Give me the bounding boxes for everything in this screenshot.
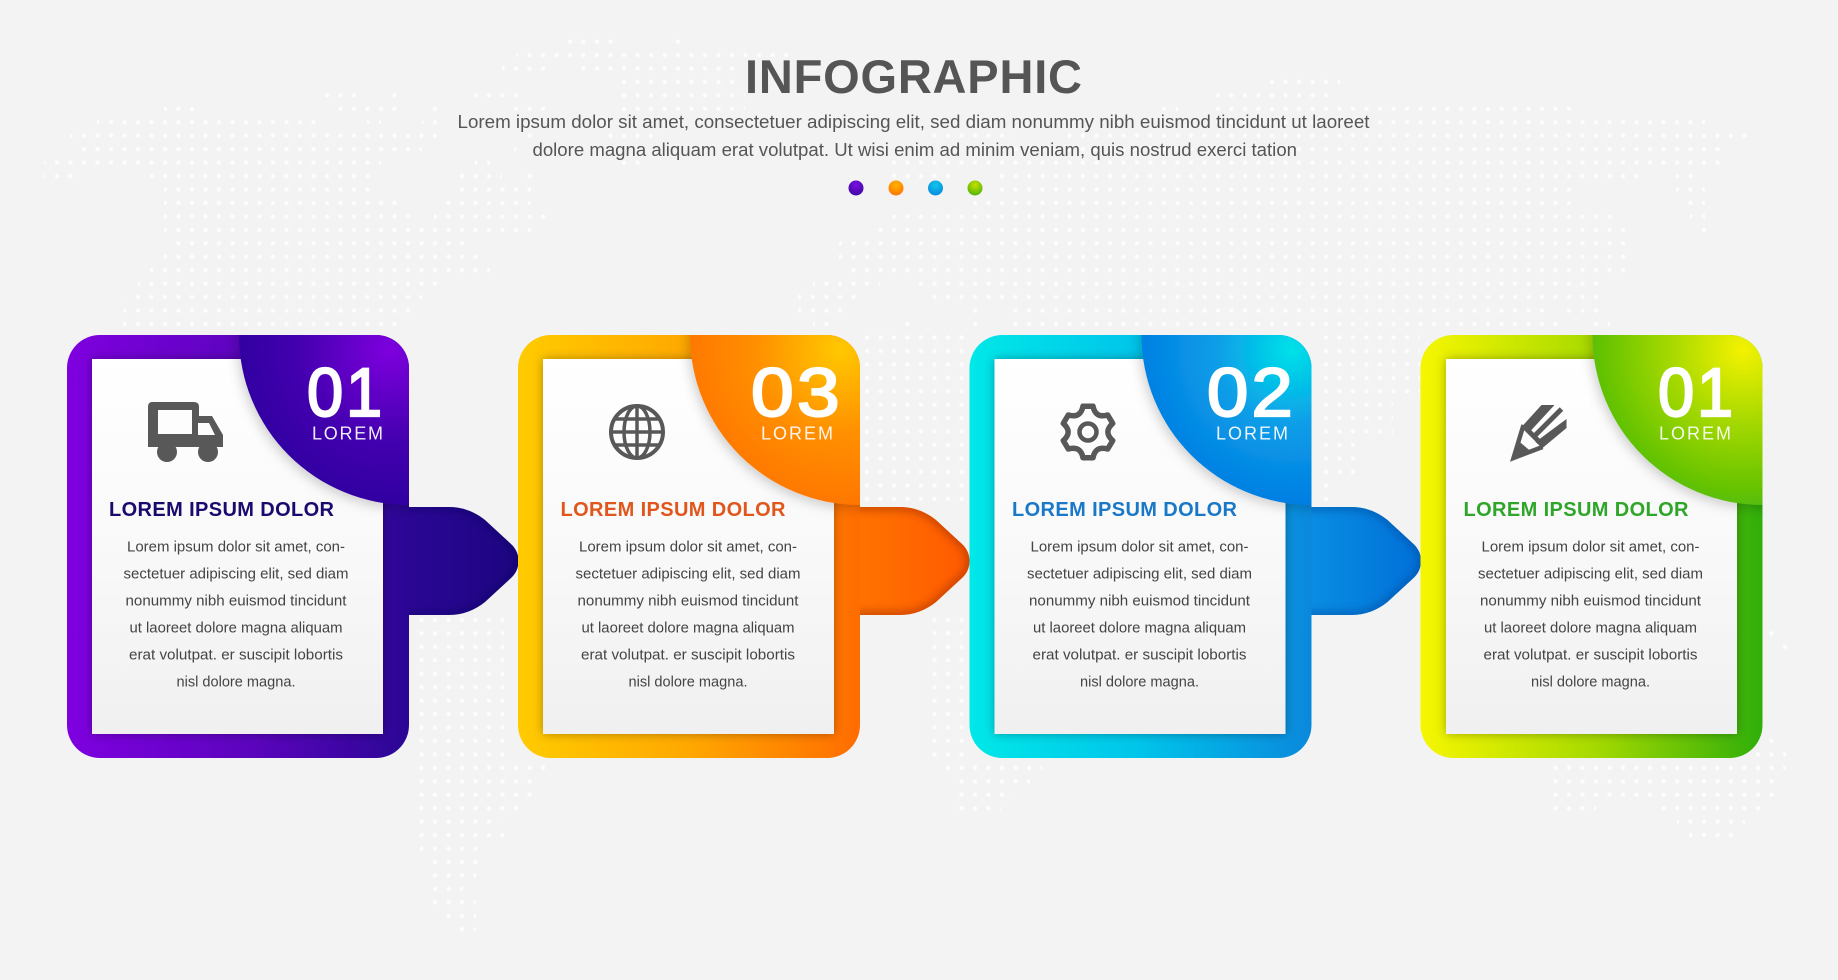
icon: truck [148,402,223,462]
body text [576,538,800,690]
body text: ut laoreet dolore magna aliquam [130,620,342,636]
panel: card 2 orange [518,335,970,758]
body text: Lorem ipsum dolor sit amet, con- [127,538,345,556]
corner quarter circle [1134,335,1312,513]
inner white panel [543,359,834,734]
body text: nisl dolore magna. [1531,674,1650,690]
number: 01 [1658,354,1736,431]
body text: nisl dolore magna. [1080,674,1199,690]
card frame [518,335,860,758]
title: INFOGRAPHIC [745,50,1082,103]
subtitle text block [458,111,1370,160]
four colored dots [848,180,982,196]
number caption: LOREM [1216,424,1288,444]
body text [1478,538,1703,690]
corner quarter circle [682,335,860,514]
number: 02 [1207,354,1296,431]
subtitle text block: dolore magna aliquam erat volutpat. Ut wisi enim ad minim veniam, quis nostrud exerci tation [532,139,1297,160]
number: 03 [751,354,843,431]
body text: Lorem ipsum dolor sit amet, con- [579,538,797,556]
body text: sectetuer adipiscing elit, sed diam [1478,566,1703,582]
card frame [67,335,409,758]
inner white panel [92,359,383,734]
inner white panel [1446,359,1737,734]
arrow: blue connector [1312,507,1420,615]
panel: card 3 blue [970,335,1420,758]
body text [124,538,348,690]
body text: ut laoreet dolore magna aliquam [1033,620,1246,636]
body text: Lorem ipsum dolor sit amet, con- [1482,538,1700,556]
body text: ut laoreet dolore magna aliquam [1484,620,1697,636]
body text: nisl dolore magna. [176,674,296,690]
body text: erat volutpat. er suscipit lobortis [129,646,343,664]
icon: globe [611,406,663,458]
number caption: LOREM [761,424,833,444]
body text [1027,538,1252,690]
number caption: LOREM [312,424,383,444]
arrow: purple connector [409,507,518,615]
body text: nonummy nibh euismod tincidunt [578,592,799,610]
heading: LOREM IPSUM DOLOR [1012,499,1238,521]
body text: erat volutpat. er suscipit lobortis [1484,646,1698,664]
icon: gear [1063,406,1113,458]
body text: sectetuer adipiscing elit, sed diam [1027,566,1252,582]
subtitle text block: Lorem ipsum dolor sit amet, consectetuer adipiscing elit, sed diam nonummy nibh euismod tincidunt ut laoreet [458,111,1370,132]
body text: Lorem ipsum dolor sit amet, con- [1030,538,1248,556]
body text: erat volutpat. er suscipit lobortis [1032,646,1246,664]
body text: sectetuer adipiscing elit, sed diam [576,566,800,582]
number: 01 [307,354,385,431]
heading: LOREM IPSUM DOLOR [560,499,786,521]
corner quarter circle [232,335,409,512]
inner white panel [994,359,1286,734]
body text: nisl dolore magna. [628,674,748,690]
arrow: orange connector [848,507,970,615]
number caption: LOREM [1659,424,1731,444]
body text: sectetuer adipiscing elit, sed diam [124,566,348,582]
icon: pencil [1512,405,1566,459]
panel: card 4 green [1420,335,1762,758]
card frame [1420,335,1762,758]
heading: LOREM IPSUM DOLOR [109,499,335,521]
body text: erat volutpat. er suscipit lobortis [581,646,795,664]
body text: nonummy nibh euismod tincidunt [1480,592,1702,610]
body text: nonummy nibh euismod tincidunt [126,592,347,610]
body text: ut laoreet dolore magna aliquam [582,620,794,636]
corner quarter circle [1586,335,1762,512]
panel: card 1 purple [67,335,518,758]
body text: nonummy nibh euismod tincidunt [1029,592,1251,610]
card frame [970,335,1312,758]
heading: LOREM IPSUM DOLOR [1464,499,1689,521]
